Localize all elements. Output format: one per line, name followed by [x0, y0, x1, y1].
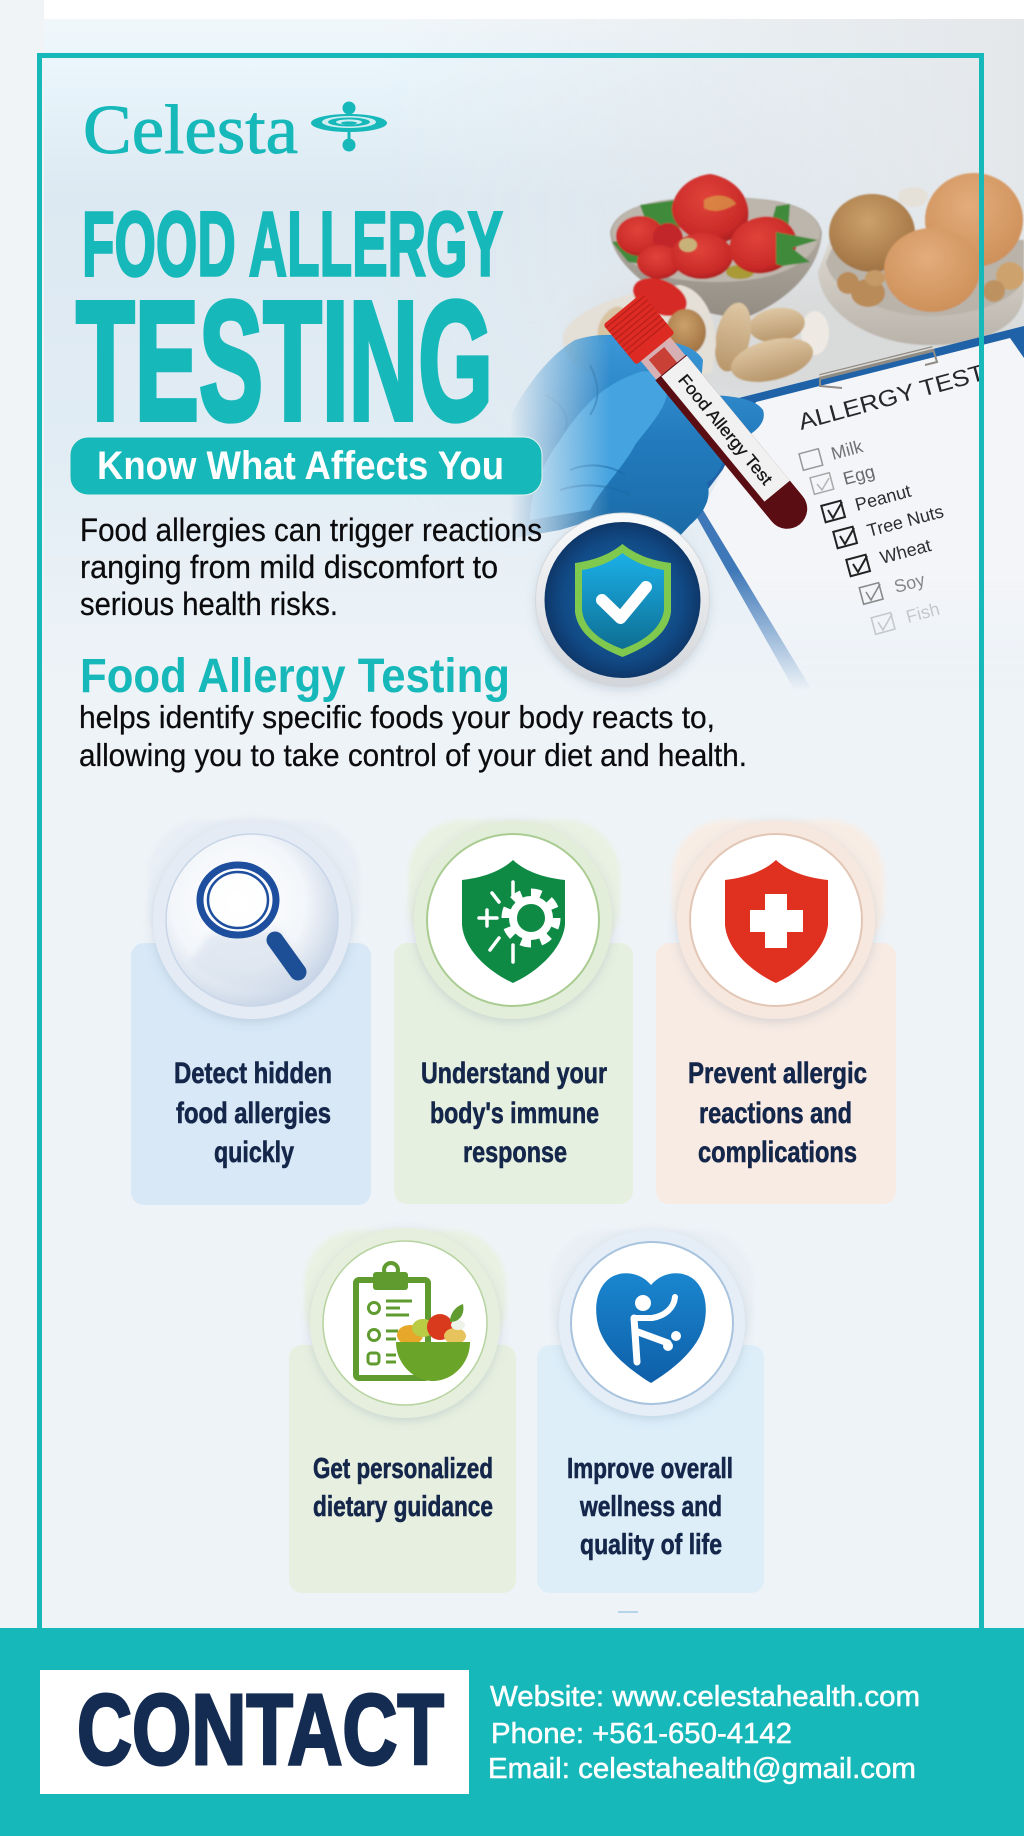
card text: Improve overall	[567, 1453, 733, 1485]
card text	[688, 1057, 867, 1169]
card text: body's immune	[430, 1097, 599, 1130]
card: personalized dietary guidance	[289, 1228, 516, 1593]
icon: heart with person	[596, 1273, 706, 1383]
checklist items: Milk	[829, 436, 866, 464]
card: prevent allergic reactions	[656, 820, 896, 1204]
title: TESTING	[76, 266, 493, 456]
checklist items: Wheat	[878, 535, 933, 568]
card text: quickly	[214, 1136, 294, 1169]
card: understand immune response	[394, 820, 633, 1204]
title	[76, 194, 503, 456]
checklist heading: ALLERGY TEST	[795, 359, 988, 435]
section description: helps identify specific foods your body reacts to,	[79, 699, 715, 735]
clipboard with allergy test checklist	[697, 326, 1024, 684]
checklist items: Egg	[841, 461, 877, 489]
checklist items: Soy	[892, 570, 927, 597]
card text	[567, 1453, 733, 1561]
page background	[44, 0, 1024, 548]
small white bowl with red item	[563, 271, 716, 381]
intro paragraph	[80, 512, 542, 622]
icon: clipboard and salad bowl	[356, 1263, 470, 1381]
card text: response	[463, 1136, 567, 1169]
checklist items: Fish	[904, 599, 942, 627]
card text: wellness and	[579, 1491, 722, 1523]
card text: Detect hidden	[174, 1057, 332, 1090]
contact details: Email: celestahealth@gmail.com	[488, 1753, 916, 1785]
icon: green shield with gear	[462, 860, 565, 983]
card text: Understand your	[421, 1057, 607, 1090]
egg and nut bowl	[818, 173, 1024, 345]
card: detect hidden food allergies	[131, 820, 371, 1205]
card text: reactions and	[699, 1097, 852, 1130]
checklist items	[799, 436, 946, 634]
intro paragraph: ranging from mild discomfort to	[80, 549, 498, 585]
subtitle pill: Know What Affects You	[97, 444, 504, 488]
contact banner	[0, 1628, 1024, 1836]
card text	[174, 1057, 332, 1169]
checklist items: Tree Nuts	[865, 501, 946, 541]
card text: food allergies	[176, 1097, 331, 1130]
frame border	[40, 56, 982, 1628]
intro paragraph: serious health risks.	[80, 586, 338, 622]
contact label box: CONTACT	[77, 1674, 444, 1786]
contact label box	[40, 1670, 469, 1794]
strawberry bowl	[610, 174, 822, 318]
test tube with blood sample	[603, 293, 819, 540]
clipboard clip	[820, 348, 937, 388]
card text: complications	[698, 1136, 857, 1169]
table surface	[590, 270, 1024, 420]
card text	[421, 1057, 607, 1169]
photo: bowls of food, clipboard and gloved hand holding test tube	[514, 172, 1024, 684]
contact details: Website: www.celestahealth.com	[490, 1681, 920, 1713]
logo	[83, 92, 387, 169]
icon: magnifying glass	[200, 865, 298, 972]
card text: dietary guidance	[313, 1491, 493, 1523]
card text	[313, 1453, 493, 1523]
card text: Prevent allergic	[688, 1057, 867, 1090]
intro paragraph: Food allergies can trigger reactions	[80, 512, 542, 548]
checklist items: Peanut	[853, 481, 913, 515]
almond bowl	[709, 299, 829, 390]
section description	[79, 699, 747, 773]
contact details	[488, 1681, 920, 1785]
contact details: Phone: +561-650-4142	[491, 1718, 792, 1750]
tube label text: Food Allergy Test	[674, 371, 776, 489]
section heading: Food Allergy Testing	[80, 650, 510, 703]
card text: Get personalized	[313, 1453, 493, 1485]
icon: red shield with cross	[725, 860, 828, 983]
section description: allowing you to take control of your diet and health.	[79, 737, 747, 773]
card text: quality of life	[580, 1529, 722, 1561]
logo wordmark: Celesta	[83, 92, 298, 169]
card: improve wellness	[537, 1230, 764, 1593]
food bowls	[563, 173, 1024, 390]
logo drop icon	[311, 102, 387, 152]
title: FOOD ALLERGY	[82, 194, 503, 296]
gloved hand	[503, 335, 764, 540]
protection badge	[536, 513, 710, 687]
